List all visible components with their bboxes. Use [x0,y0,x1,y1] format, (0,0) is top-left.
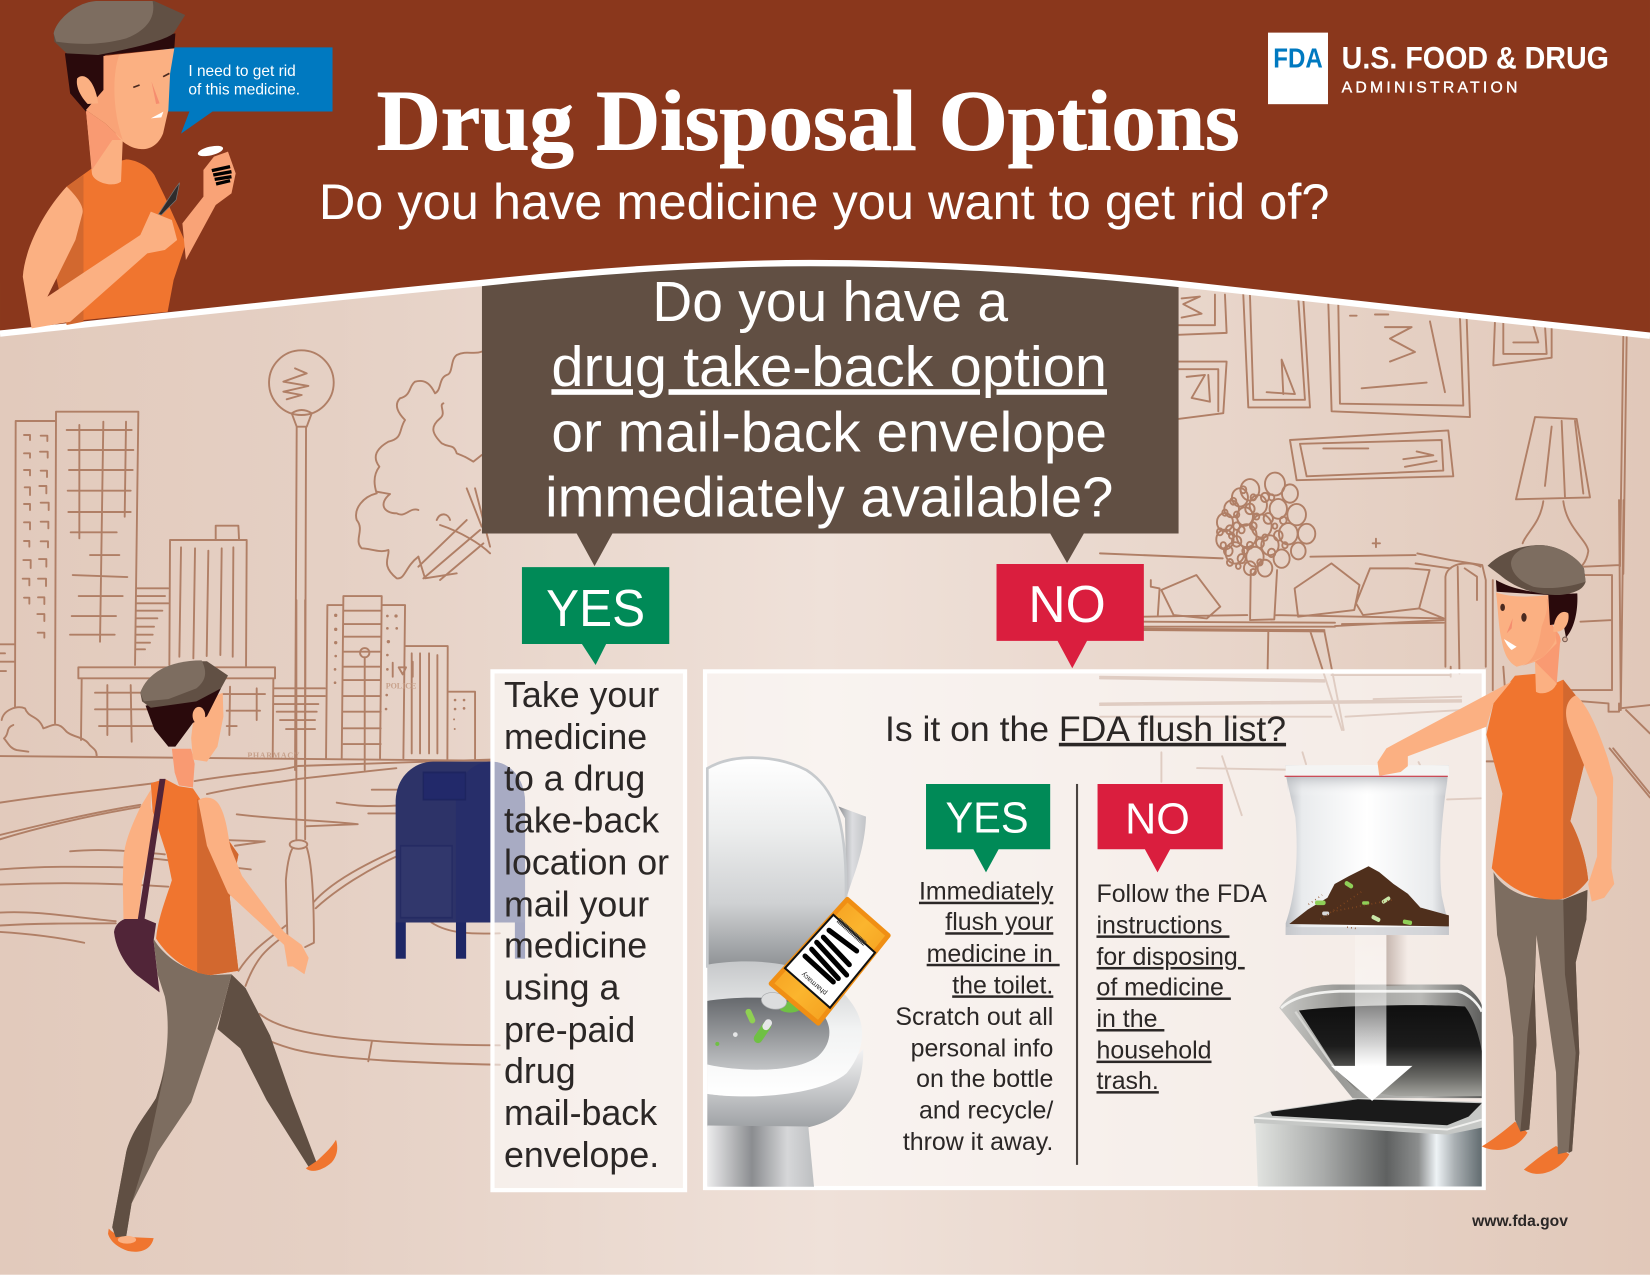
text: take-back instructions: mail-back [504,1093,657,1133]
text: flush instructions: Scratch out all [895,1003,1053,1031]
icon: blue mailbox [396,762,525,959]
badge: flush yes: YES [945,794,1029,842]
line art: city street [0,350,500,1065]
figure: woman with medicine [23,1,236,328]
line art: skyline: POLICE [386,682,416,691]
text: take-back instructions: location or [504,842,669,882]
text: take-back instructions: take-back [504,800,659,840]
badge: flush yes [926,784,1050,872]
icon: pill bottle: pharmacy [800,970,829,997]
text: trash instructions: trash. [1096,1067,1159,1095]
text: take-back instructions: drug [504,1051,576,1091]
text: take-back instructions: to a drug [504,758,645,798]
line art: living room [1100,295,1650,815]
text: trash instructions: household [1096,1037,1212,1065]
text: take-back instructions: using a [504,968,619,1008]
text: flush instructions: personal info [911,1034,1053,1062]
text: trash instructions: of medicine [1096,973,1231,1001]
badge: no [997,564,1144,668]
text: website: www.fda.gov [1471,1213,1568,1230]
divider: flush columns [1076,784,1078,1165]
badge: yes [522,567,669,665]
text: trash instructions: Follow the FDA [1096,880,1267,908]
figure head [1488,545,1586,693]
header band [0,0,1650,336]
title: Drug Disposal Options [377,72,1240,168]
text: take-back instructions: pre-paid [504,1010,635,1050]
line art: plant [1216,473,1315,577]
text: take-back instructions: medicine [504,926,647,966]
text: take-back instructions [504,675,669,1175]
line art: skyline: PHARMACY [247,751,300,760]
text: flush instructions: and recycle/ [919,1097,1053,1125]
panel: question box [482,253,1179,566]
text: trash instructions: for disposing [1096,943,1245,971]
badge: yes: YES [546,579,645,637]
icon: pill bottle [771,899,888,1023]
illustration: trash can [1254,985,1482,1187]
text: take-back instructions: Take your [504,675,659,715]
text: flush instructions: throw it away. [903,1128,1053,1156]
callout: speech bubble [163,47,333,134]
text: flush instructions: flush your [945,908,1053,936]
text: trash instructions [1096,880,1267,1095]
text: flush instructions: medicine in [927,940,1060,968]
badge: flush no [1098,784,1223,872]
text: main question: Do you have a [652,270,1009,333]
text: main question: drug take-back option [551,335,1107,398]
text: flush instructions [895,878,1060,1156]
subtitle: Do you have medicine you want to get rid of? [319,173,1329,230]
text: take-back instructions: envelope. [504,1135,659,1175]
logo: FDA: FDA [1273,42,1323,73]
arrow: bag into trash [1331,935,1412,1101]
line art: skyline [0,350,490,770]
text: trash instructions: instructions [1096,911,1229,939]
text: main question: or mail-back envelope [551,400,1107,463]
heading: flush list question: Is it on the FDA flush list? [885,709,1286,749]
figure: woman walking [108,660,337,1252]
figure body [1377,674,1614,1174]
logo: FDA [1268,33,1609,104]
text: take-back instructions: mail your [504,885,649,925]
badge: flush no: NO [1125,795,1190,843]
badge: no: NO [1028,575,1106,633]
text: trash instructions: in the [1096,1005,1164,1033]
callout: speech bubble: of this medicine. [188,82,300,99]
line art: sofa and table [1100,500,1650,733]
line art: streets [0,600,500,1065]
panel: no flush list [705,671,1484,1188]
logo: FDA: ADMINISTRATION [1342,80,1517,97]
callout: speech bubble: I need to get rid [188,63,296,80]
text: main question: immediately available? [545,466,1113,529]
panel: yes take-back [492,671,685,1190]
text: main question [545,270,1113,529]
logo: FDA: U.S. FOOD & DRUG [1342,39,1609,75]
text: take-back instructions: medicine [504,717,647,757]
line art: floor details [1161,748,1650,815]
text: flush instructions: the toilet. [952,971,1053,999]
text: flush instructions: on the bottle [916,1065,1053,1093]
icon: pills in bowl [715,991,801,1046]
text: flush instructions: Immediately [919,878,1054,906]
illustration: toilet [707,758,888,1187]
figure: woman holding bag [1377,545,1614,1174]
illustration: bag of medicine and dirt [1285,765,1449,935]
bottom edge [0,1275,1650,1276]
line art: wall frames and lamp [1178,295,1627,574]
